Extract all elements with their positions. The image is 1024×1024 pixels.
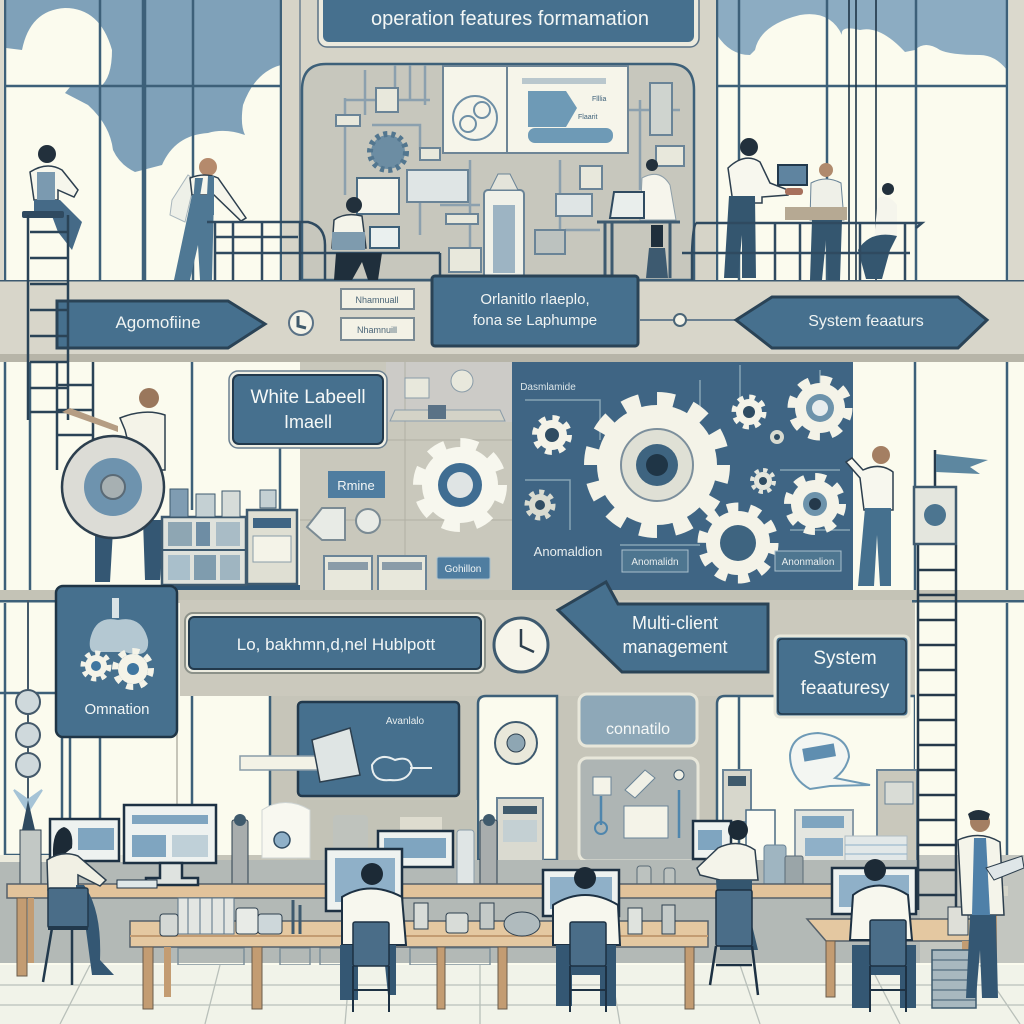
banner: HubSpot label: Lo, bakhmn,d,nel Hublpott — [237, 635, 436, 654]
label: Connatilo — [579, 694, 697, 746]
icon: stacked crates under desk — [932, 950, 976, 1008]
panel: blue gear board: Dasmlamide — [520, 382, 576, 393]
labels: small stacked tags — [341, 289, 414, 340]
icon: wall devices — [336, 83, 684, 272]
card: Omnation with gears — [56, 586, 177, 737]
panel: arrow information card: Avanlalo — [386, 716, 425, 727]
banner: System features card: System — [813, 648, 877, 669]
person: standing worker at laptop — [597, 159, 680, 278]
label: White Label Image — [229, 371, 387, 448]
chart: wall display screens — [443, 66, 628, 153]
ladder: upper left — [28, 215, 93, 470]
label: White Label Image: White Labeell — [250, 387, 366, 408]
person: seated worker at centre — [332, 197, 399, 280]
panel: lower beam — [0, 590, 1024, 696]
railing: top right platform — [682, 223, 922, 280]
title banner: operation features formamation — [371, 8, 649, 30]
railing: top left platform — [207, 222, 440, 280]
icon: small gears on board — [527, 380, 848, 578]
monitors: front row — [326, 849, 916, 916]
labels: small stacked tags: Nhamnuill — [357, 325, 397, 335]
icon: main large gear — [593, 401, 721, 529]
person: front worker left — [340, 863, 406, 1012]
panel: top left window with sky — [0, 0, 284, 282]
desk: rear long desk — [7, 884, 1008, 976]
banner: system features arrow: System feaaturs — [808, 313, 924, 330]
labels: small stacked tags: Nhamnuall — [355, 295, 399, 305]
icon: round dial on window — [495, 722, 537, 764]
panel: lower wainscot and floor — [0, 855, 1024, 1024]
icon: server cabinets right — [723, 770, 917, 878]
icon: rear worker chair — [710, 890, 758, 995]
person: front worker right — [850, 859, 916, 1012]
banner: Multi-client management: management — [622, 637, 728, 657]
person: rear left seated worker — [43, 827, 114, 985]
ladder: right with flag — [914, 450, 988, 910]
person: seated worker at top left — [22, 145, 82, 250]
desk: front desks — [130, 919, 987, 1009]
person: worker with overalls at top left — [170, 158, 246, 280]
banner: centre label: fona se Laphumpe — [473, 312, 597, 329]
person: rear right standing worker — [697, 820, 758, 950]
panel: blue gear board — [512, 362, 853, 590]
icon: desk books and cups — [160, 898, 968, 936]
monitors: rear row — [50, 805, 731, 888]
banner: system features arrow — [736, 297, 987, 348]
icon: big valve wheel with worker — [62, 388, 165, 582]
label: Gohillon tag: Gohillon — [445, 564, 481, 575]
chart: monitor content — [78, 815, 722, 858]
icon: large white gear on wall — [419, 444, 501, 526]
panel: middle right window — [853, 362, 1024, 592]
icon: speech bubble — [790, 733, 870, 789]
icon: small dial and connector — [289, 311, 313, 335]
panel: arrow information card — [240, 702, 459, 796]
person: worker beside gear board — [846, 446, 893, 586]
banner: centre label — [432, 276, 638, 346]
labels: board tags: Anomaldion — [534, 544, 602, 559]
icon: hanging chain left — [14, 600, 42, 812]
panel: control tablet — [579, 758, 698, 861]
banner: HubSpot label — [185, 613, 485, 673]
labels: board tags: Anonmalion — [782, 557, 834, 568]
banner: left arrow label — [57, 301, 265, 348]
label: Gohillon tag — [437, 557, 490, 579]
panel: lower windows and wall — [0, 603, 1024, 860]
icon: central glass tank — [484, 174, 524, 278]
shelf: binders and boxes — [162, 489, 300, 603]
banner: centre label: Orlanitlo rlaeplo, — [480, 291, 590, 308]
person: standing worker far right — [958, 810, 1024, 998]
banner: System features card: feaaturesy — [801, 678, 890, 699]
panel: central upper machinery wall — [282, 0, 716, 282]
labels: board tags: Anomalidn — [631, 557, 679, 568]
icon: tall bottles behind rear desk — [20, 800, 803, 891]
chart: wall display screens: Flaarit — [578, 114, 598, 121]
banner: Multi-client management: Multi-client — [632, 613, 718, 633]
labels: board tags — [534, 544, 841, 572]
chart: wall display screens: Flllia — [592, 96, 606, 103]
banner: left arrow label: Agomofiine — [115, 313, 201, 332]
panel: middle centre utility wall — [300, 362, 512, 592]
label: Connatilo: connatilo — [606, 721, 670, 738]
person: group at top right — [724, 138, 897, 280]
icon: wall clock — [494, 618, 548, 672]
icon: connector node — [640, 314, 735, 326]
label: Rmine tag: Rmine — [337, 478, 375, 493]
banner: System features card — [775, 636, 909, 717]
label: Rmine tag — [328, 471, 385, 498]
icon: dark cog on wall — [370, 134, 406, 170]
panel: top right window with sky — [717, 0, 1024, 282]
card: Omnation with gears: Omnation — [84, 701, 150, 718]
icon: back wall gear and cabinets centre — [262, 798, 543, 864]
person: front worker centre — [553, 867, 620, 1012]
label: White Label Image: Imaell — [284, 412, 332, 432]
title banner — [318, 0, 699, 47]
panel: middle left window — [0, 362, 300, 592]
panel: upper beam — [0, 280, 1024, 362]
banner: Multi-client management — [558, 582, 768, 672]
